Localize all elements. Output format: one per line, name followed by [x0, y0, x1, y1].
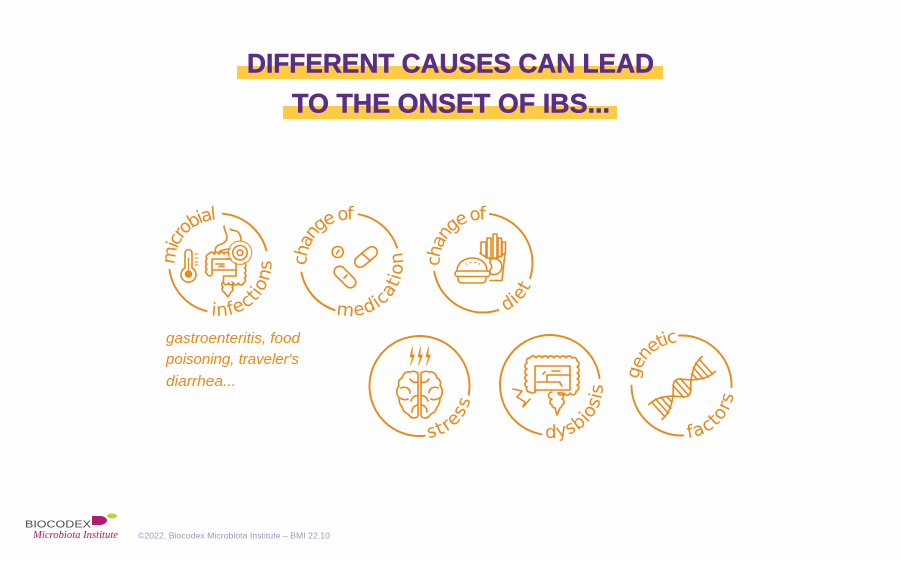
badge: microbial infections: infections [212, 261, 272, 316]
icon: thermometer [181, 250, 198, 282]
title: DIFFERENT CAUSES CAN LEAD [247, 48, 654, 78]
icon: DNA helix [649, 356, 715, 420]
badge: microbial infections [164, 206, 272, 316]
icon: pills [332, 244, 379, 290]
icon: burger and fries [455, 234, 506, 283]
badge: genetic factors [630, 331, 734, 438]
logo: Biocodex Microbiota Institute: BIOCODEX [25, 520, 91, 530]
badge: stress [368, 335, 470, 438]
title: TO THE ONSET OF IBS... [292, 88, 610, 118]
icon: intestine with pain mark [513, 356, 579, 415]
badge: stress: stress [428, 398, 470, 438]
caption: examples of microbial infections: diarrhea... [166, 374, 236, 390]
badge: genetic factors: genetic [630, 331, 676, 378]
badge: change of medication: medication [338, 254, 404, 316]
copyright: ©2022, Biocodex Microbiota Institute – BMI 22.10 [138, 530, 330, 540]
badge: microbial infections: microbial [164, 206, 215, 263]
badge: dysbiosis [499, 334, 603, 441]
badge: change of diet: diet [502, 281, 531, 310]
logo: Biocodex Microbiota Institute [25, 514, 119, 541]
badge: change of diet [426, 206, 534, 314]
badge: dysbiosis: dysbiosis [546, 385, 603, 441]
caption: examples of microbial infections [165, 331, 301, 390]
logo: Biocodex Microbiota Institute: Microbiota Institute [32, 530, 119, 541]
caption: examples of microbial infections: gastroenteritis, food [166, 331, 301, 347]
icon: brain with lightning bolts [397, 347, 442, 418]
badge: change of medication: change of [294, 206, 354, 264]
icon: intestine with infection target [206, 226, 252, 297]
badge: change of medication [294, 206, 404, 316]
badge: change of diet: change of [426, 206, 486, 265]
caption: examples of microbial infections: poisoning, traveler's [165, 352, 299, 368]
badge: genetic factors: factors [686, 394, 734, 438]
title [237, 48, 663, 119]
